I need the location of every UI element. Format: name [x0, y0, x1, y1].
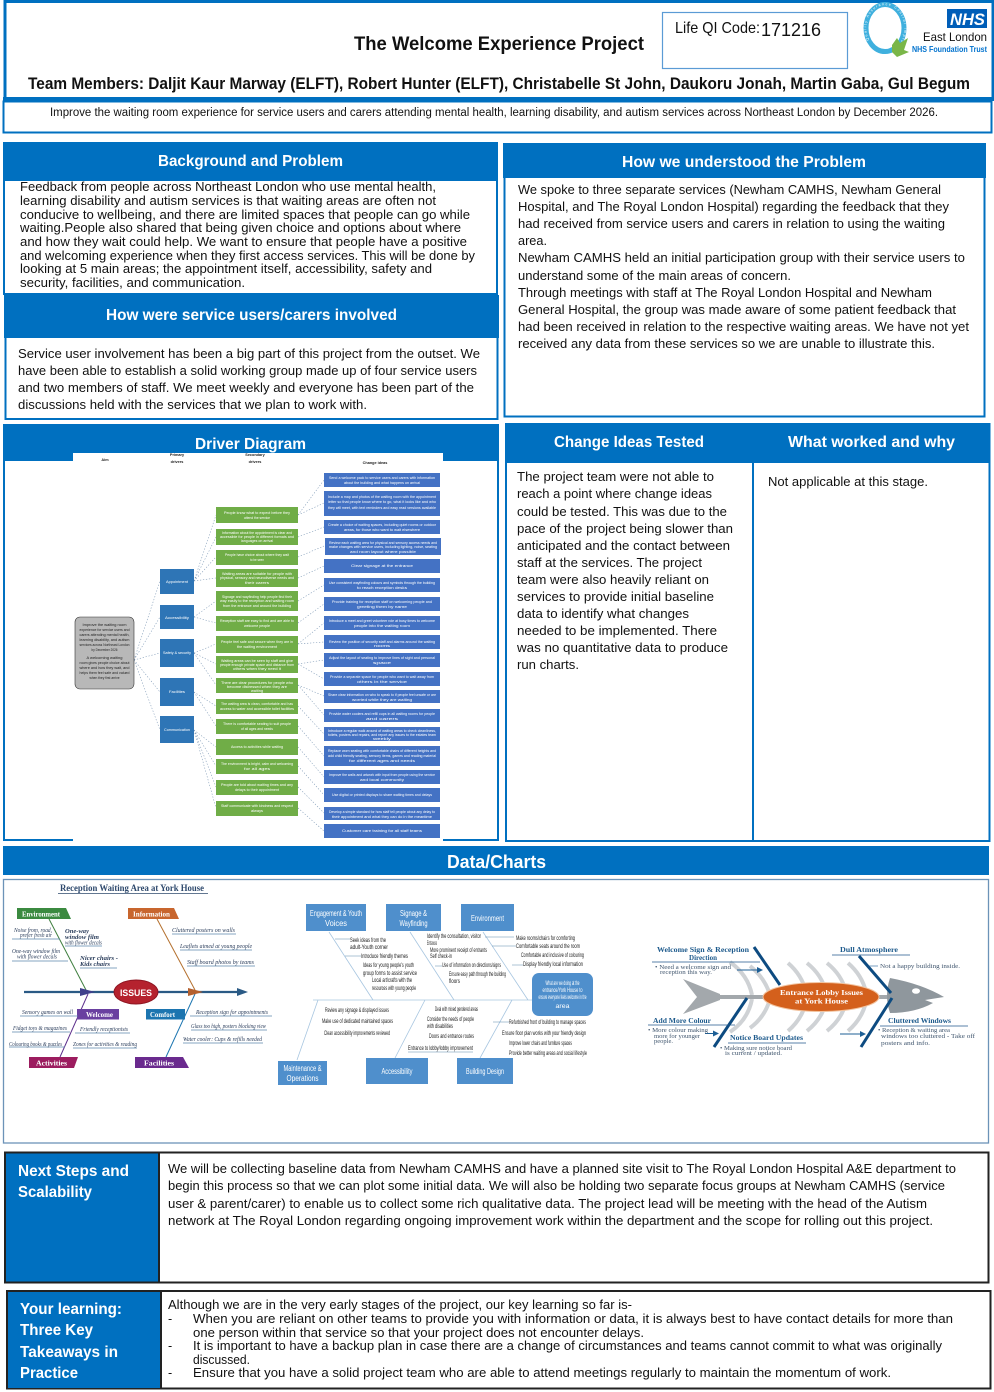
change ideas: about the building and what happens on arrival [344, 481, 420, 485]
secondary drivers: access to water and accessible toilet facilities [220, 707, 294, 711]
body text: We will be collecting baseline data from Newham CAMHS and have a planned site visit to The Royal London Hospital A&E department to [168, 1162, 956, 1176]
change ideas: Adjust the layout of seating to improve lines of sight and personal [329, 656, 435, 660]
chart: welcome fishbone diagram: Ensure easy path through the building [449, 971, 506, 978]
change ideas: Review the position of security staff and alarms around the waiting [329, 640, 435, 644]
secondary drivers: Information about the appointment is clear and [222, 531, 292, 535]
secondary drivers: waiting [251, 689, 263, 693]
secondary drivers: others when they need it [233, 667, 282, 671]
logo: NHS East London [912, 9, 987, 54]
chart: welcome fishbone diagram: Engagement & Youth [310, 909, 362, 918]
chart: welcome fishbone diagram: Seek ideas from the [350, 937, 386, 944]
aim statement [4, 102, 992, 132]
body text: - [168, 1366, 172, 1380]
secondary drivers: for all ages [244, 767, 270, 771]
Life QI code box: 171216 [761, 20, 821, 40]
body text: have been able to establish a solid working group made up of four service users [18, 364, 477, 378]
chart: welcome fishbone diagram: with disabilities [426, 1023, 453, 1030]
change ideas: Share clear information on who to speak to if people feel unsafe or are [328, 693, 436, 697]
change ideas: others in the service [357, 680, 407, 684]
panel: your learning [7, 1290, 990, 1389]
chart: welcome fishbone diagram: Wayfinding [400, 919, 428, 928]
aim box: Improve the waiting room [82, 623, 126, 627]
chart: welcome fishbone diagram: Ensure floor plan works with your friendly design [502, 1030, 586, 1037]
change ideas: letter so that people know where to go, what it looks like and who [328, 500, 436, 504]
label: Practice [20, 1365, 78, 1382]
header panel [3, 0, 994, 101]
body text [168, 1298, 953, 1380]
chart: entrance lobby fishbone: Notice Board Updates [730, 1033, 803, 1042]
chart: welcome fishbone diagram: Operations [286, 1074, 318, 1083]
heading: Background and Problem [158, 153, 343, 170]
secondary drivers: become distressed when they are [227, 685, 287, 689]
body text: one person within that service so that your project does not encounter delays. [193, 1326, 644, 1340]
label: Takeaways in [20, 1344, 118, 1361]
change ideas [324, 473, 441, 838]
chart: welcome fishbone diagram: Doors and entrance routes [429, 1033, 474, 1040]
chart: welcome fishbone diagram: Entrance to lobby/lobby improvement [408, 1045, 473, 1052]
aim box: carers attending mental health, [80, 633, 130, 637]
change ideas: Replace worn seating with comfortable chairs of different heights and [328, 749, 436, 753]
primary drivers: Appointment [166, 580, 189, 584]
chart: welcome fishbone diagram: floors [449, 978, 461, 985]
chart: reception waiting area fishbone: Activities [36, 1058, 67, 1068]
chart: reception waiting area fishbone: Kids chairs [79, 961, 110, 968]
body text: and two members of staff. We meet weekly and everyone has been part of the [18, 381, 474, 395]
chart: reception waiting area fishbone: with flower decals [65, 940, 102, 946]
change ideas: Use digital or printed displays to share waiting times and delays [332, 793, 432, 797]
chart: entrance lobby fishbone: Entrance Lobby Issues [780, 988, 863, 997]
heading: what worked: What worked and why [788, 434, 955, 451]
body text: Although we are in the very early stages of the project, our key learning so far is- [168, 1298, 632, 1312]
secondary drivers: physical, sensory and neurodiverse needs and [220, 576, 294, 580]
body text: - [168, 1312, 172, 1326]
aim box: room gives people choice about [80, 661, 130, 665]
body text: When you are reliant on other teams to provide you with information or data, it is always best to have contact details for more than [193, 1312, 953, 1326]
chart: reception waiting area fishbone: Nicer chairs - [79, 955, 118, 962]
label [18, 1163, 129, 1201]
chart: reception waiting area fishbone: Fidget toys & magazines [12, 1025, 67, 1032]
secondary drivers: delays to their appointment [235, 788, 280, 792]
chart: reception waiting area fishbone: Environment [22, 910, 60, 918]
change ideas text: services to provide initial baseline [517, 590, 714, 604]
change ideas: Introduce a regular walk around of waiting areas to check cleanliness, [328, 729, 436, 733]
change ideas: make changes with service users, including lighting, noise, seating [329, 545, 437, 549]
secondary drivers: to be seen [250, 558, 264, 562]
title: The Welcome Experience Project [354, 34, 645, 55]
chart: welcome fishbone diagram: Signage & [400, 909, 427, 918]
chart: welcome fishbone diagram [278, 904, 593, 1085]
column headers: Secondary [245, 453, 266, 457]
change ideas: Customer care training for all staff teams [342, 829, 422, 833]
change ideas: Provide training for reception staff on welcoming people and [332, 600, 432, 604]
body text: Hospital, and The Royal London Hospital) regarding the feedback that they [518, 200, 950, 214]
chart: welcome fishbone diagram: Ideas for young people's youth [363, 962, 414, 969]
chart: reception waiting area fishbone: Cluttered posters on walls [172, 927, 235, 934]
body text [18, 347, 480, 412]
secondary drivers: their carers [245, 581, 269, 585]
chart: reception waiting area fishbone: Welcome [86, 1010, 114, 1019]
chart: entrance lobby fishbone: windows too cluttered - Take off [881, 1033, 975, 1040]
secondary drivers: Access to activities while waiting [231, 745, 283, 749]
aim box [75, 617, 134, 689]
chart: reception waiting area fishbone: Friendly receptionists [79, 1026, 128, 1033]
chart: entrance lobby fishbone: people. [654, 1039, 674, 1045]
connectors [134, 480, 324, 831]
change ideas text: pace of the project being slower than [517, 522, 733, 536]
body text: security, facilities, and communication. [20, 276, 245, 290]
chart: entrance lobby fishbone: • Reception & waiting area [878, 1028, 950, 1034]
secondary drivers: Signage and wayfinding help people find their [222, 595, 293, 599]
change ideas: Provide a separate space for people who want to wait away from [330, 675, 434, 679]
chart: entrance lobby fishbone: is current / updated. [725, 1051, 783, 1057]
body text: had been received in relation to the respective waiting areas. We have not yet [518, 320, 970, 334]
body text: understand some of the main areas of concern. [518, 269, 791, 283]
change ideas: greeting them by name [357, 605, 407, 609]
chart: entrance lobby fishbone: Welcome Sign & Reception [657, 945, 750, 954]
heading: How were service users/carers involved [106, 307, 397, 324]
chart: welcome fishbone diagram: Building Design [466, 1067, 504, 1076]
change ideas text: could be tested. This was due to the [517, 505, 727, 519]
chart: welcome fishbone diagram: More prominent receipt of entrants [430, 947, 487, 954]
chart: reception waiting area fishbone: Water cooler: Cups & refills needed [183, 1036, 263, 1043]
body text: It is important to have a backup plan in case there are a change of circumstances and teams cannot commit to what was originally [193, 1339, 943, 1353]
secondary drivers: attend the service [244, 516, 270, 520]
label: Scalability [18, 1184, 92, 1201]
change ideas: Include a map and photos of the waiting room with the appointment [328, 495, 437, 499]
panel: data and charts [4, 880, 988, 1143]
chart: welcome fishbone diagram: Local art/crafts with the [372, 977, 412, 984]
aim box: helps them feel safe and valued [80, 671, 130, 675]
change ideas: they will meet, with text reminders and easy read versions available [328, 506, 436, 510]
chart: welcome fishbone diagram: group forms to assist service [363, 970, 417, 977]
change ideas: toilets, posters and repairs, and report any issues to the estates team [328, 733, 436, 737]
change ideas text: team were also heavily reliant on [517, 573, 709, 587]
change ideas text: anticipated and the contact between [517, 539, 730, 553]
chart: reception waiting area fishbone: Comfort [150, 1010, 175, 1019]
chart: reception waiting area fishbone: Reception sign for appointments [195, 1009, 268, 1016]
chart: welcome fishbone diagram: adult-Youth corner [350, 944, 389, 951]
aim box: where and how they wait, and [80, 666, 130, 670]
secondary drivers: People are told about waiting times and any [221, 783, 293, 787]
secondary drivers: the waiting environment [237, 645, 278, 649]
chart: welcome fishbone diagram: Use of information on directions/signs [442, 962, 501, 969]
body text: discussed. [193, 1353, 250, 1367]
body text: had received from service users and carers in relation to using the waiting [518, 217, 945, 231]
chart: welcome fishbone diagram: Identify the consultation, visitor [427, 933, 482, 940]
chart: reception waiting area fishbone: Leaflets aimed at young people [179, 943, 252, 950]
primary drivers: Communication [164, 728, 190, 732]
change ideas: people into the waiting room [354, 624, 410, 628]
chart: welcome fishbone diagram: Make use of dedicated maintained spaces [322, 1018, 393, 1025]
body text: General Hospital, the group was made aware of some patient feedback that [518, 303, 957, 317]
panel: driver diagram [3, 424, 499, 841]
body text: waiting.People also shared that being given choice and options about where [19, 221, 461, 235]
chart: welcome fishbone diagram: Improve lower chairs and furniture spaces [509, 1040, 572, 1047]
secondary drivers: always [251, 809, 263, 813]
secondary drivers: People have choice about where they wait [225, 553, 290, 557]
secondary drivers: people enough private space and distance from [220, 663, 294, 667]
logo: QI ring [864, 2, 909, 57]
change ideas: Review each waiting area for physical and sensory access needs and [329, 541, 437, 545]
change ideas: rooms [374, 644, 390, 648]
chart: welcome fishbone diagram: Consider the needs of people [427, 1016, 474, 1023]
chart: welcome fishbone diagram: ensure everyone feels welcome in the [538, 995, 587, 1001]
chart: welcome fishbone diagram: Self check-in [430, 953, 452, 960]
change ideas text: staff at the services. The project [517, 556, 703, 570]
primary drivers: Safety & security [163, 651, 191, 655]
secondary drivers: welcome people [244, 624, 270, 628]
chart: entrance lobby fishbone: more for younger [654, 1033, 700, 1040]
secondary drivers: There is comfortable seating to suit people [223, 722, 291, 726]
chart: entrance lobby fishbone: • Making sure notice board [720, 1046, 792, 1052]
change ideas text: reach a point where change ideas [517, 487, 712, 501]
change ideas: Create a choice of waiting spaces, including quiet rooms or outdoor [328, 523, 437, 527]
Life QI code box: Life QI Code: [675, 20, 760, 37]
aim box: services across Northeast London [80, 643, 130, 647]
body text: network at The Royal London regarding ongoing improvement work within the department and the scope for rolling out this project. [168, 1214, 933, 1228]
body text: and welcoming experience when they first access services. This will be done by [20, 249, 476, 263]
chart: entrance lobby fishbone: at York House [795, 996, 849, 1006]
aim statement: Improve the waiting room experience for service users and carers attending mental health, learning disability, and autism services across Northeast London by December 2026. [50, 107, 938, 119]
body text: area. [518, 234, 547, 248]
panel: how we understood the problem [503, 143, 986, 416]
secondary drivers: of all ages and needs [241, 727, 273, 731]
chart: welcome fishbone diagram: Entrances [427, 940, 437, 947]
chart: entrance lobby fishbone: Cluttered Windows [888, 1016, 951, 1025]
chart: reception waiting area fishbone [9, 884, 272, 1068]
secondary drivers: There are clear procedures for people who [221, 681, 293, 685]
chart: welcome fishbone diagram: Maintenance & [284, 1064, 322, 1073]
label: Three Key [20, 1322, 93, 1339]
column headers: drivers [249, 460, 261, 464]
chart: welcome fishbone diagram: area [556, 1004, 570, 1010]
heading band: data and charts [3, 846, 989, 875]
secondary drivers: The waiting area is clean, comfortable and has [221, 702, 293, 706]
chart: entrance lobby fishbone: posters and info. [881, 1040, 931, 1047]
body text: conducive to wellbeing, and there are limited spaces that people can go while [20, 208, 470, 222]
change ideas: areas, for those who want to wait elsewhere [344, 528, 420, 532]
chart: entrance lobby fishbone: Direction [689, 953, 718, 962]
body text: Through meetings with staff at The Royal London Hospital and Newham [518, 286, 932, 300]
change ideas: worried while they are waiting [352, 698, 412, 702]
change ideas text: run charts. [517, 658, 579, 672]
change ideas: Develop a simple standard for how staff tell people about any delay to [329, 810, 435, 814]
heading: Driver Diagram [195, 436, 306, 453]
primary drivers [160, 569, 194, 743]
body text [168, 1162, 956, 1228]
body text: We spoke to three separate services (Newham CAMHS, Newham General [518, 183, 941, 197]
secondary drivers: People feel safe and secure when they are in [221, 640, 293, 644]
chart: welcome fishbone diagram: Display friendly local information [523, 961, 583, 968]
change ideas: for different ages and needs [349, 759, 415, 763]
change ideas text [516, 470, 733, 672]
secondary drivers: The environment is bright, calm and welcoming [221, 762, 293, 766]
column headers: Change ideas [363, 461, 387, 465]
change ideas: weekly [373, 737, 391, 741]
secondary drivers: Waiting areas can be seen by staff and give [221, 659, 293, 663]
panel: next steps and scalability [5, 1152, 988, 1283]
chart: reception waiting area fishbone: One-way window film [12, 948, 60, 955]
chart: welcome fishbone diagram: What are we doing at the [546, 981, 580, 987]
logo: NHS East London: NHS [950, 10, 986, 29]
chart: reception waiting area fishbone: Sensory games on wall [22, 1009, 73, 1016]
chart: entrance lobby fishbone [648, 945, 975, 1057]
chart: reception waiting area fishbone: ISSUES [120, 988, 152, 999]
body text: begin this process so that we can plot some initial data. We will also be holding two separate focus groups at Newham CAMHS (service [168, 1179, 945, 1193]
chart: welcome fishbone diagram: Clean accessibility improvements reviewed [324, 1030, 390, 1037]
change ideas: Provide water coolers and refill cups in all waiting rooms for people [329, 712, 435, 716]
column headers: Aim [101, 458, 109, 462]
logo: NHS East London: East London [923, 30, 987, 44]
heading band: data and charts: Data/Charts [447, 852, 546, 872]
body text [518, 183, 970, 351]
aim box: A welcoming waiting [86, 656, 122, 660]
chart: reception waiting area fishbone: Reception Waiting Area at York House [60, 884, 204, 894]
body text: Feedback from people across Northeast London who use mental health, [20, 180, 436, 194]
body text [19, 180, 476, 290]
change ideas: space [373, 661, 391, 665]
secondary drivers: Waiting areas are suitable for people with [222, 572, 292, 576]
panel: service users and carers involved [4, 295, 499, 419]
change ideas: Use consistent wayfinding colours and symbols through the building [329, 581, 435, 585]
chart: reception waiting area fishbone: Facilities [144, 1058, 174, 1068]
chart: reception waiting area fishbone: Colouring books & puzzles [9, 1041, 62, 1048]
change ideas: their appointment and what they can do in the meantime [332, 815, 432, 819]
secondary drivers: from the entrance and around the building [223, 604, 291, 608]
chart: reception waiting area fishbone: window film [65, 934, 99, 941]
chart: entrance lobby fishbone: • Need a welcome sign and [655, 965, 731, 971]
chart: entrance lobby fishbone: Add More Colour [653, 1016, 712, 1025]
chart: reception waiting area fishbone: Information [133, 910, 171, 918]
secondary drivers: accessible for people in different formats and [220, 535, 294, 539]
primary drivers: Accessibility [165, 616, 189, 620]
change ideas text: was no quantitative data to produce [516, 641, 728, 655]
secondary drivers: languages on arrival [241, 539, 273, 543]
secondary drivers: Staff communicate with kindness and respect [221, 804, 294, 808]
chart: welcome fishbone diagram: Comfortable and inclusive of colouring [521, 952, 584, 959]
change ideas: Improve the walls and artwork with input from people using the service [329, 773, 435, 777]
aim box: learning disability, and autism [80, 638, 130, 642]
chart: reception waiting area fishbone: Glass too high, posters blocking view [191, 1023, 267, 1030]
chart: welcome fishbone diagram: Make rooms/chairs for comforting [516, 935, 575, 942]
change ideas: and room layout where possible [350, 550, 416, 554]
chart: welcome fishbone diagram: Voices [325, 919, 347, 928]
change ideas: Clear signage at the entrance [351, 564, 413, 568]
chart: reception waiting area fishbone: Zones for activities & reading [73, 1041, 138, 1048]
change ideas text: The project team were not able to [517, 470, 714, 484]
label: Next Steps and [18, 1163, 129, 1180]
secondary drivers: People know what to expect before they [224, 511, 290, 515]
heading: How we understood the Problem [622, 154, 866, 171]
column headers [101, 453, 387, 465]
panel: background and problem [3, 142, 498, 294]
chart: welcome fishbone diagram: Provide better waiting areas and social lifestyle [509, 1050, 587, 1057]
secondary drivers: way easily to the reception and waiting room [220, 599, 294, 603]
body text: looking at 5 main areas; the appointment itself, accessibility, safety and [20, 262, 432, 276]
label [20, 1301, 122, 1382]
chart: entrance lobby fishbone: Dull Atmosphere [840, 945, 899, 954]
label: Your learning: [20, 1301, 122, 1318]
change ideas: add child friendly seating, sensory items, games and reading material [328, 754, 436, 758]
body text: discussions held with the services that we plan to work with. [18, 398, 367, 412]
change ideas: and carers [366, 717, 398, 721]
body text: and how they wait could help. We want to ensure that people have a positive [20, 235, 467, 249]
chart: welcome fishbone diagram: Review any signage & displayed issues [325, 1007, 389, 1014]
column headers: drivers [171, 460, 183, 464]
body text: Ensure that you have a solid project team who are able to attend meetings regularly to maintain the momentum of work. [193, 1366, 891, 1380]
body text: - [168, 1339, 172, 1353]
panel: change ideas and what worked [505, 423, 990, 841]
body text: user & parent/carer) to enable us to collect some rich qualitative data. The project lead will be meeting with the head of the Autism [168, 1197, 927, 1211]
body text: received any data from these services so we are unable to illustrate this. [518, 337, 935, 351]
change ideas: and local community [360, 778, 404, 782]
column headers: Primary [170, 453, 185, 457]
change ideas text: data to identify what changes [517, 607, 689, 621]
logo: NHS East London: NHS Foundation Trust [912, 45, 987, 54]
primary drivers: Facilities [169, 690, 185, 694]
chart: reception waiting area fishbone: with flower decals [17, 954, 57, 960]
chart: welcome fishbone diagram: resources with young people [372, 985, 416, 992]
aim box: experience for service users and [80, 628, 130, 632]
body text: Service user involvement has been a big part of this project from the outset. We [18, 347, 480, 361]
change ideas: Introduce a meet and greet volunteer role at busy times to welcome [329, 619, 435, 623]
body text: learning disability and autism services is that waiting areas are often not [20, 194, 437, 208]
chart: reception waiting area fishbone: Noise from, road, [13, 927, 52, 934]
what worked text: Not applicable at this stage. [768, 475, 928, 489]
chart: entrance lobby fishbone: reception this way. [660, 970, 713, 976]
aim box: when they first arrive [90, 676, 120, 680]
change ideas text: needed to be implemented. There [517, 624, 717, 638]
chart: welcome fishbone diagram: Deal with mixed gendered areas [435, 1006, 478, 1013]
chart: entrance lobby fishbone: • More colour making [648, 1028, 708, 1034]
chart: reception waiting area fishbone: prefer fresh air [19, 932, 52, 939]
change ideas: Send a welcome pack to service users and carers with information [329, 476, 435, 480]
chart: reception waiting area fishbone: Staff board photos by teams [187, 959, 254, 966]
chart: welcome fishbone diagram: Introduce friendly themes [361, 953, 408, 960]
secondary drivers: Reception staff are easy to find and are able to [220, 619, 294, 623]
chart: welcome fishbone diagram: Environment [471, 914, 505, 923]
chart: welcome fishbone diagram: entrance/York House to [542, 988, 583, 994]
body text: Newham CAMHS held an initial participation group with their service users to [518, 251, 965, 265]
aim box: by December 2026 [92, 648, 118, 652]
chart: entrance lobby fishbone: Not a happy building inside. [880, 964, 961, 970]
heading: change ideas: Change Ideas Tested [554, 434, 704, 451]
chart: reception waiting area fishbone: One-way [65, 928, 89, 935]
secondary drivers [216, 507, 298, 816]
change ideas: to reach reception desks [357, 586, 407, 590]
Life QI code box [662, 12, 848, 68]
chart: welcome fishbone diagram: Refurbished front of building to manage spaces [509, 1019, 586, 1026]
chart: welcome fishbone diagram: Accessibility [382, 1067, 412, 1076]
chart: welcome fishbone diagram: Comfortable seats around the room [516, 943, 580, 950]
